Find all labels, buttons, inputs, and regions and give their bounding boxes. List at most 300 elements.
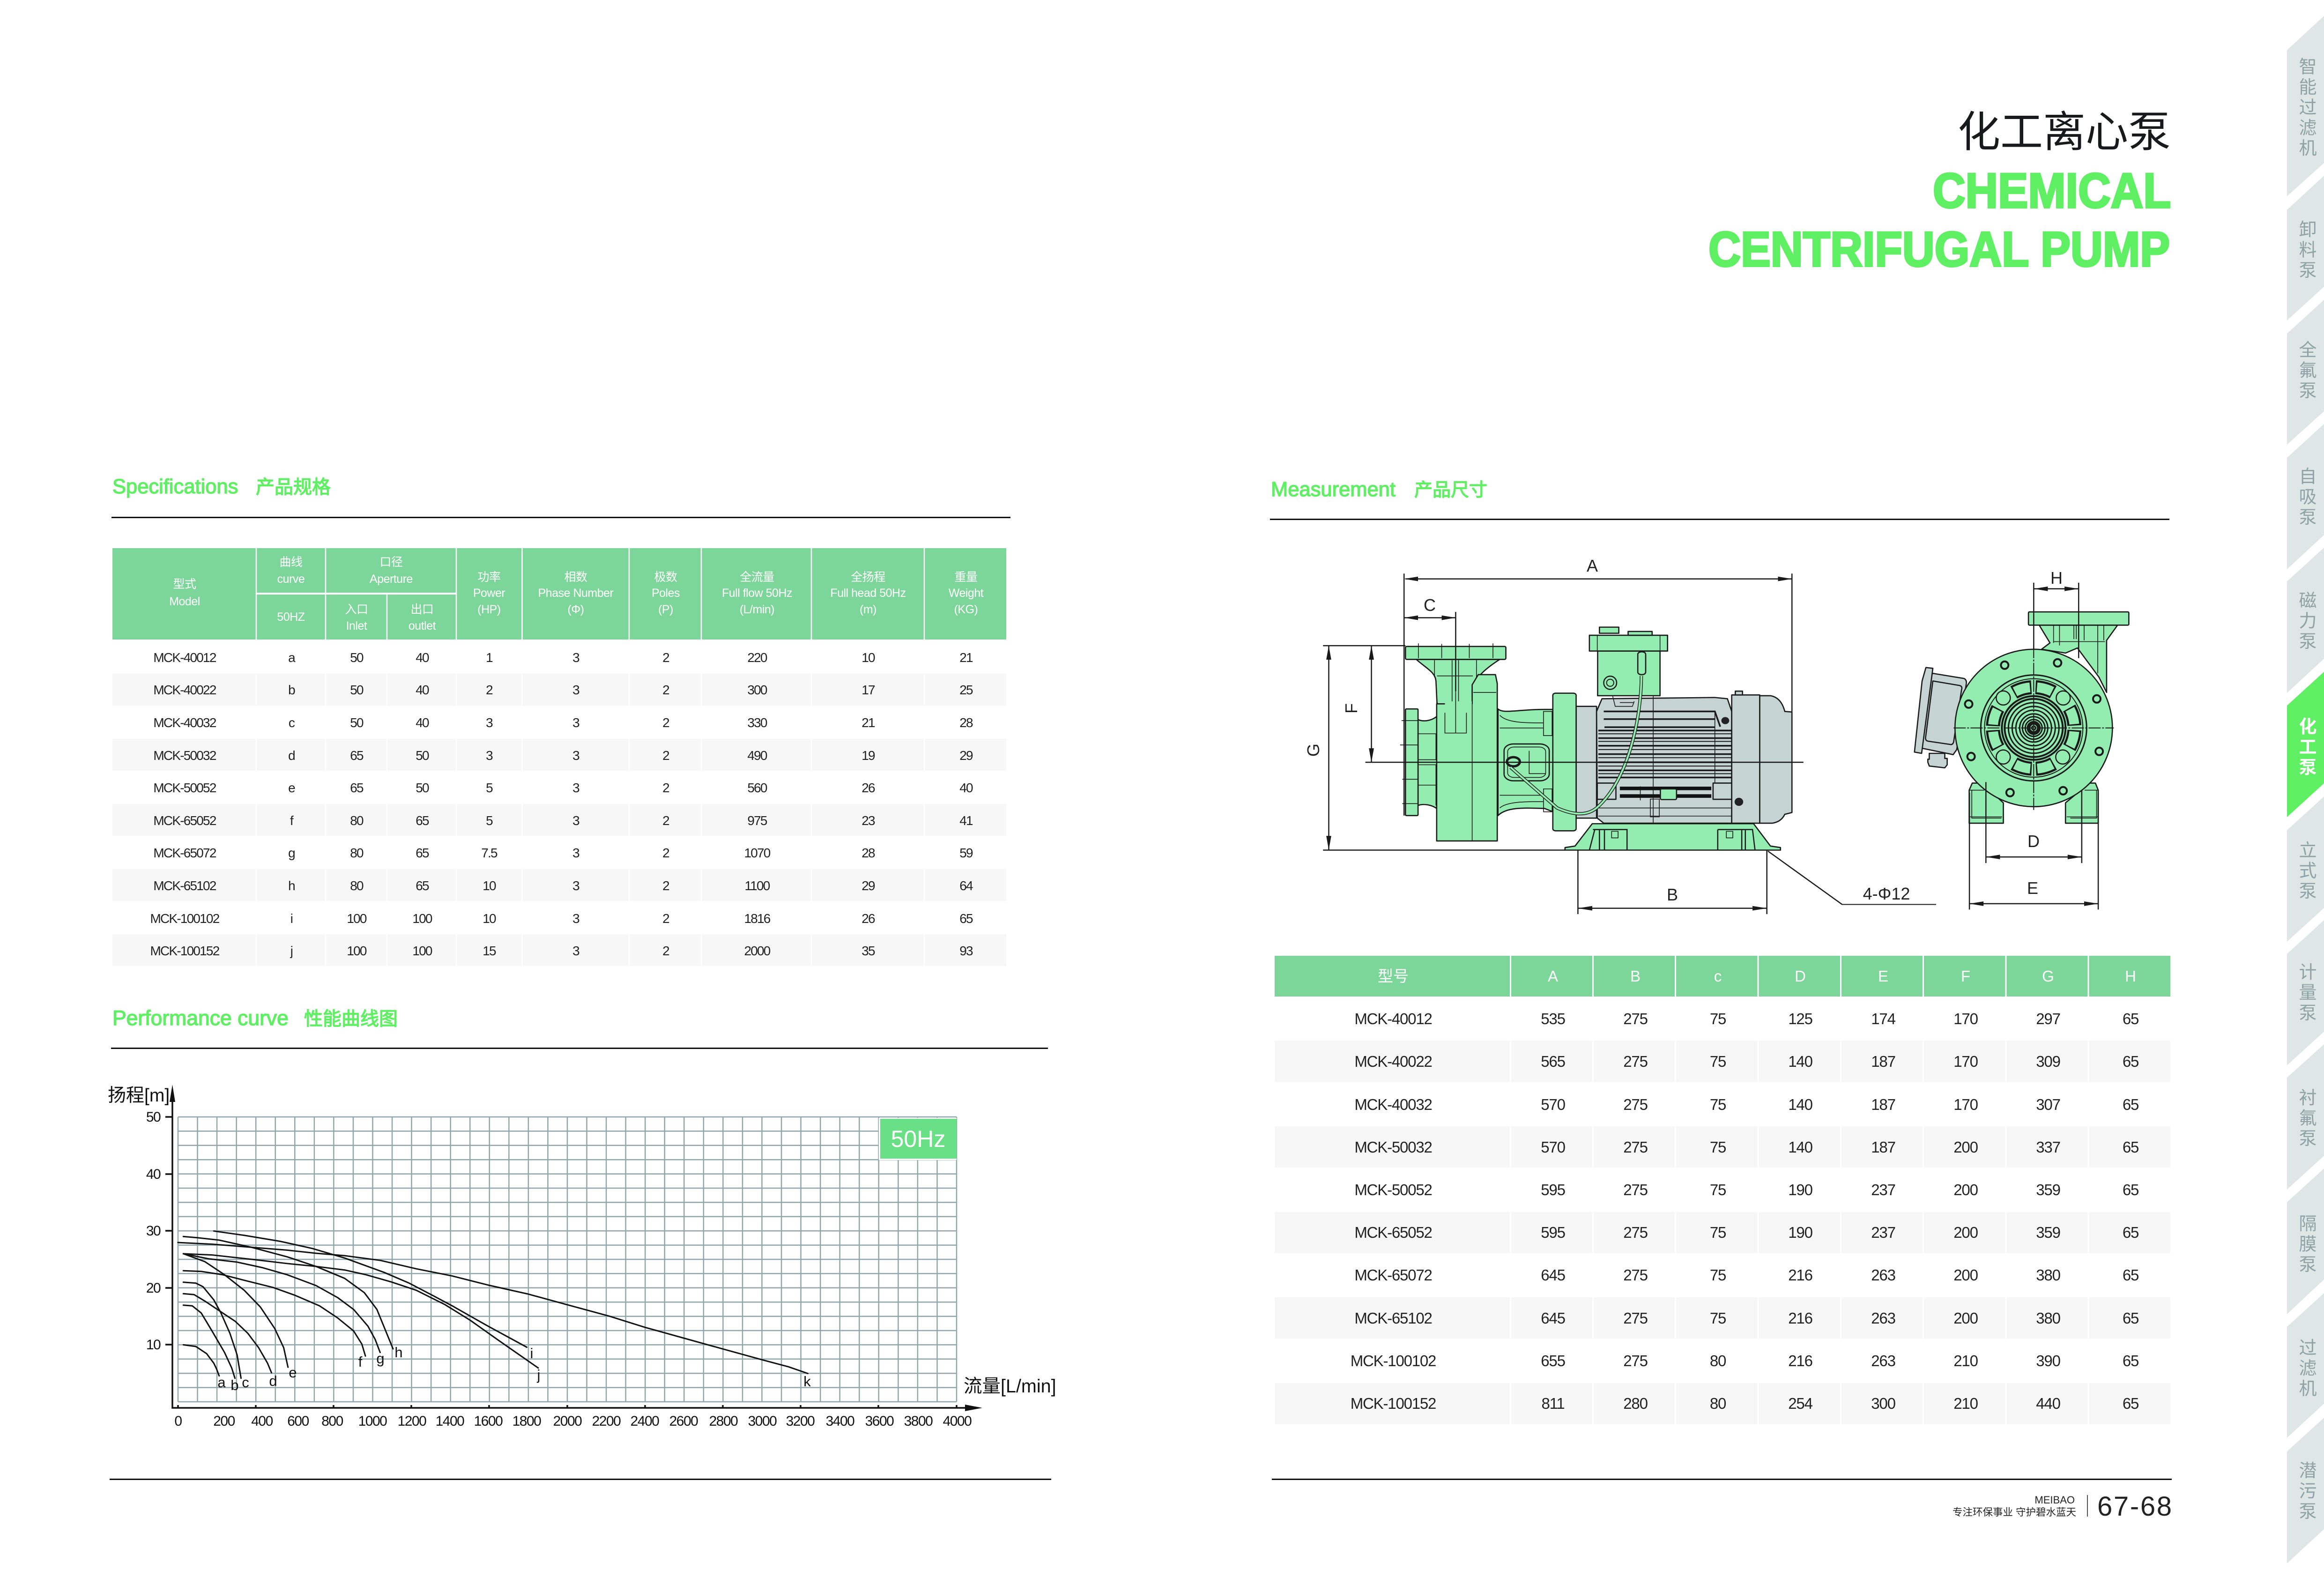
measurement row MCK-100152: MCK-100152 — [1351, 1395, 1436, 1412]
tab: 自吸泵 — [2287, 424, 2324, 569]
spec row MCK-65102: 80 — [350, 878, 364, 893]
measurement row MCK-65072: 75 — [1710, 1266, 1726, 1284]
spec row MCK-65052: 41 — [959, 813, 973, 828]
spec row MCK-40012: 1 — [486, 650, 493, 665]
heading: specifications — [111, 476, 1010, 518]
y tick labels: 40 — [146, 1167, 161, 1182]
measurement row MCK-40022: 275 — [1623, 1053, 1648, 1070]
spec row MCK-50052 — [153, 781, 973, 795]
curve labels: e — [289, 1364, 297, 1381]
spec row MCK-50032: 50 — [416, 748, 429, 763]
measurement row MCK-65102: 275 — [1623, 1309, 1648, 1327]
heading: measurement: 产品尺寸 — [1414, 480, 1487, 500]
title block — [1708, 97, 2171, 277]
measurement row MCK-100152: 254 — [1788, 1395, 1813, 1412]
spec row MCK-40022: 50 — [350, 683, 364, 697]
spec table header: 口径 — [379, 556, 403, 569]
measurement row MCK-50052 — [1354, 1181, 2138, 1198]
measurement row MCK-65102: 75 — [1710, 1309, 1726, 1327]
measurement row MCK-40022: MCK-40022 — [1354, 1053, 1432, 1070]
spec row MCK-100102: 2 — [662, 911, 669, 926]
spec table header: (m) — [860, 603, 876, 616]
spec table header: 极数 — [654, 571, 677, 584]
outlet flange, neck and feet — [1969, 612, 2129, 823]
measurement row MCK-40012: MCK-40012 — [1354, 1010, 1432, 1027]
heading: specifications: 产品规格 — [256, 477, 331, 498]
x tick labels: 3600 — [865, 1413, 894, 1429]
spec row MCK-40022: 17 — [861, 683, 875, 697]
measurement row MCK-65102: 263 — [1871, 1309, 1895, 1327]
measurement row MCK-50032: MCK-50032 — [1354, 1138, 1432, 1156]
spec row MCK-65052: 2 — [662, 813, 669, 828]
measurement row MCK-65052: 237 — [1871, 1224, 1895, 1241]
measurement row MCK-65072: 216 — [1788, 1266, 1812, 1284]
measurement row MCK-40022: 65 — [2123, 1053, 2138, 1070]
spec table header: Full head 50Hz — [830, 587, 906, 600]
tab: 立式泵 — [2287, 796, 2324, 942]
spec row MCK-50032: d — [288, 748, 295, 763]
curve labels: f — [358, 1354, 363, 1370]
spec row MCK-50052: 65 — [350, 781, 364, 795]
callout: 4-Φ12 mounting holes: 4-Φ12 — [1863, 884, 1910, 903]
measurement row MCK-65052: 190 — [1788, 1224, 1813, 1241]
tab: 衬氟泵 — [2287, 1044, 2324, 1190]
measurement row MCK-40022: 309 — [2036, 1053, 2060, 1070]
spec row MCK-50052: 2 — [662, 781, 669, 795]
spec row MCK-65052: f — [290, 813, 294, 828]
measurement row MCK-40012: 125 — [1788, 1010, 1812, 1027]
measurement row MCK-100152: 440 — [2036, 1395, 2061, 1412]
measurement row MCK-40022: 140 — [1788, 1053, 1813, 1070]
x tick labels: 1400 — [436, 1413, 464, 1429]
spec row MCK-100152: 100 — [347, 944, 367, 958]
spec table header: Inlet — [346, 619, 367, 632]
spec row MCK-40012 — [153, 650, 973, 665]
front view labels — [2027, 568, 2063, 898]
x tick labels: 1800 — [512, 1413, 541, 1429]
chart axes — [165, 1085, 982, 1411]
measurement row MCK-40022 — [1354, 1053, 2138, 1070]
tab: 智能过滤机 — [2287, 16, 2324, 196]
x tick labels: 1000 — [358, 1413, 387, 1429]
spec table header: 功率 — [477, 571, 501, 584]
measurement table header: c — [1714, 967, 1722, 985]
x tick labels: 1200 — [398, 1413, 426, 1429]
measurement table header: F — [1961, 967, 1970, 985]
measurement row MCK-40032: 75 — [1710, 1096, 1726, 1113]
discharge flange — [1405, 643, 1506, 733]
x tick labels — [174, 1413, 972, 1429]
tab: 全氟泵: 全氟泵 — [2296, 341, 2317, 402]
title: CHEMICAL: CHEMICAL — [1933, 164, 2171, 218]
spec row MCK-65102: 29 — [861, 878, 875, 893]
spec row MCK-65052 — [153, 813, 973, 828]
measurement row MCK-50052: 75 — [1710, 1181, 1726, 1198]
measurement row MCK-65052 — [1354, 1224, 2138, 1241]
dimension arrows — [1326, 577, 1792, 910]
spec table header: 型式 — [173, 578, 196, 591]
spec row MCK-40012: MCK-40012 — [153, 650, 216, 665]
page number: 67-68 — [2097, 1491, 2172, 1522]
measurement row MCK-65052: 595 — [1541, 1224, 1565, 1241]
curve labels: k — [803, 1373, 811, 1390]
tab: 过滤机: 过滤机 — [2296, 1339, 2316, 1399]
measurement row MCK-65072: 200 — [1953, 1266, 1978, 1284]
spec row MCK-50032: 490 — [747, 748, 767, 763]
spec row MCK-65072: 7.5 — [481, 846, 497, 860]
spec row MCK-65102: 64 — [959, 878, 973, 893]
tab: 隔膜泵: 隔膜泵 — [2296, 1214, 2316, 1275]
x tick labels: 2800 — [709, 1413, 738, 1429]
spec row MCK-40032: 3 — [572, 715, 579, 730]
curve labels: c — [242, 1374, 249, 1391]
measurement row MCK-40022: 187 — [1871, 1053, 1895, 1070]
spec row MCK-40022: 25 — [959, 683, 973, 697]
spec row MCK-40012: 21 — [959, 650, 973, 665]
measurement table header: H — [2125, 967, 2136, 985]
spec row MCK-100152: MCK-100152 — [150, 944, 220, 958]
spec table header: Poles — [652, 587, 680, 600]
measurement row MCK-100102: 263 — [1871, 1352, 1895, 1369]
heading: measurement: Measurement — [1271, 478, 1396, 501]
spec table header: outlet — [408, 619, 436, 632]
measurement row MCK-65052: 200 — [1953, 1224, 1978, 1241]
spec row MCK-65102: 2 — [662, 878, 669, 893]
measurement row MCK-40032: MCK-40032 — [1354, 1096, 1432, 1113]
spec row MCK-100102: 1816 — [744, 911, 771, 926]
side view labels: A — [1587, 556, 1598, 575]
y tick labels: 20 — [146, 1280, 161, 1296]
spec row MCK-65102: 65 — [416, 878, 429, 893]
spec table header: 曲线 — [279, 556, 303, 569]
spec row MCK-40012: 3 — [572, 650, 579, 665]
spec table header: Full flow 50Hz — [722, 587, 792, 600]
volute casing — [1437, 661, 1497, 841]
spec row MCK-50032: MCK-50032 — [153, 748, 216, 763]
spec table header: 重量 — [954, 571, 978, 584]
measurement row MCK-50032: 200 — [1953, 1138, 1978, 1156]
measurement row MCK-40032: 170 — [1953, 1096, 1978, 1113]
measurement row MCK-50052: 275 — [1623, 1181, 1648, 1198]
measurement row MCK-50052: MCK-50052 — [1354, 1181, 1432, 1198]
spec row MCK-65072: g — [288, 846, 295, 860]
spec row MCK-65072: 80 — [350, 846, 364, 860]
measurement row MCK-40032: 570 — [1541, 1096, 1566, 1113]
spec row MCK-50052: 3 — [572, 781, 579, 795]
measurement row MCK-65102: 216 — [1788, 1309, 1812, 1327]
spec row MCK-50032 — [153, 748, 973, 763]
flange disc and rotor rings — [1953, 646, 2114, 810]
coupling flange — [1553, 693, 1576, 831]
spec row MCK-65102: 3 — [572, 878, 579, 893]
measurement row MCK-65102: 380 — [2036, 1309, 2061, 1327]
spec table header: (HP) — [477, 603, 501, 616]
conduit — [1510, 676, 1641, 814]
spec row MCK-65072: 59 — [959, 846, 973, 860]
measurement row MCK-40022: 170 — [1953, 1053, 1978, 1070]
spec row MCK-40022: 40 — [416, 683, 429, 697]
measurement row MCK-40032: 140 — [1788, 1096, 1813, 1113]
spec row MCK-40032: 330 — [747, 715, 767, 730]
bearing bracket — [1498, 709, 1553, 816]
measurement row MCK-50052: 190 — [1788, 1181, 1813, 1198]
spec row MCK-100152: 100 — [412, 944, 432, 958]
measurement row MCK-100102: 216 — [1788, 1352, 1812, 1369]
spec row MCK-40022: b — [288, 683, 295, 697]
spec row MCK-100102: 26 — [861, 911, 875, 926]
measurement row MCK-65052: 359 — [2036, 1224, 2060, 1241]
spec table header: Power — [473, 587, 505, 600]
measurement row MCK-40032: 187 — [1871, 1096, 1895, 1113]
measurement row MCK-65052: MCK-65052 — [1354, 1224, 1432, 1241]
pump side view — [1400, 627, 1792, 850]
spec row MCK-40022: MCK-40022 — [153, 683, 216, 697]
measurement row MCK-65052: 75 — [1710, 1224, 1726, 1241]
fan cover — [1721, 691, 1792, 823]
tab: 卸料泵 — [2287, 176, 2324, 320]
tab: 卸料泵: 卸料泵 — [2296, 220, 2316, 281]
tab: 化工泵 (active) — [2287, 672, 2324, 817]
spec row MCK-65052: 23 — [861, 813, 875, 828]
spec row MCK-40032 — [153, 715, 973, 730]
spec row MCK-100152 — [150, 944, 973, 958]
50Hz badge — [879, 1118, 957, 1160]
sidebar navigation tabs — [2287, 16, 2324, 1563]
measurement row MCK-100102: 655 — [1541, 1352, 1565, 1369]
measurement row MCK-65102: MCK-65102 — [1354, 1309, 1432, 1327]
tab: 化工泵 (active): 化工泵 — [2296, 717, 2317, 778]
spec row MCK-65052: 80 — [350, 813, 364, 828]
motor body — [1596, 685, 1732, 827]
spec row MCK-65052: 5 — [486, 813, 493, 828]
curve labels: a — [217, 1374, 226, 1391]
spec row MCK-40022: 300 — [747, 683, 767, 697]
spec row MCK-40022: 3 — [572, 683, 579, 697]
x tick labels: 0 — [174, 1413, 182, 1429]
measurement row MCK-65072: MCK-65072 — [1354, 1266, 1432, 1284]
spec row MCK-65052: MCK-65052 — [153, 813, 216, 828]
x tick labels: 4000 — [943, 1413, 972, 1429]
spec table header: 全扬程 — [851, 571, 885, 584]
measurement row MCK-40012: 297 — [2036, 1010, 2060, 1027]
terminal box — [1589, 627, 1668, 707]
measurement row MCK-100152: 280 — [1623, 1395, 1648, 1412]
spec table header: 50HZ — [277, 610, 305, 624]
measurement row MCK-65072: 65 — [2123, 1266, 2138, 1284]
spec table header: 相数 — [564, 571, 587, 584]
front view labels: H — [2050, 568, 2063, 588]
measurement row MCK-50032: 65 — [2123, 1138, 2138, 1156]
measurement row MCK-50032: 337 — [2036, 1138, 2060, 1156]
spec row MCK-65072: 2 — [662, 846, 669, 860]
measurement row MCK-50052: 65 — [2123, 1181, 2138, 1198]
title: Chinese: 化工离心泵 — [1958, 97, 2171, 159]
measurement row MCK-40032: 307 — [2036, 1096, 2060, 1113]
spec row MCK-65072: 3 — [572, 846, 579, 860]
tab: 智能过滤机: 智能过滤机 — [2296, 57, 2316, 159]
curve labels: h — [394, 1344, 403, 1361]
tab: 计量泵 — [2287, 920, 2324, 1065]
spec row MCK-40032: c — [289, 715, 295, 730]
measurement row MCK-100102 — [1351, 1352, 2138, 1369]
spec table header: Aperture — [370, 573, 413, 586]
measurement row MCK-65102: 200 — [1953, 1309, 1978, 1327]
spec row MCK-50032: 19 — [861, 748, 875, 763]
tab: 过滤机 — [2287, 1293, 2324, 1438]
spec row MCK-100102: MCK-100102 — [150, 911, 220, 926]
dimension lines — [1323, 573, 1842, 914]
x tick labels: 3800 — [904, 1413, 933, 1429]
x tick labels: 2000 — [553, 1413, 582, 1429]
performance curve chart — [108, 1085, 1056, 1429]
spec row MCK-40022 — [153, 683, 973, 697]
measurement table header — [1275, 956, 2170, 997]
measurement table header: 型号 — [1378, 967, 1409, 985]
spec row MCK-65072: 65 — [416, 846, 429, 860]
measurement row MCK-65102 — [1354, 1309, 2138, 1327]
tab: 自吸泵: 自吸泵 — [2296, 467, 2316, 528]
spec table header: Phase Number — [538, 587, 614, 600]
measurement row MCK-50052: 237 — [1871, 1181, 1895, 1198]
spec row MCK-100152: 93 — [959, 944, 973, 958]
measurement row MCK-50032: 140 — [1788, 1138, 1813, 1156]
spec row MCK-65102: MCK-65102 — [153, 878, 216, 893]
measurement row MCK-50032 — [1354, 1138, 2138, 1156]
side view labels: B — [1667, 885, 1678, 904]
spec row MCK-100152: 2 — [662, 944, 669, 958]
tab: 磁力泵: 磁力泵 — [2296, 591, 2317, 652]
spec table header: 入口 — [345, 603, 368, 616]
measurement row MCK-100102: 65 — [2123, 1352, 2138, 1369]
x tick labels: 3000 — [748, 1413, 777, 1429]
spec row MCK-100152: 2000 — [744, 944, 771, 958]
spec row MCK-40032: 3 — [486, 715, 493, 730]
heading: performance curve: 性能曲线图 — [304, 1009, 398, 1029]
measurement row MCK-50032: 187 — [1871, 1138, 1895, 1156]
measurement row MCK-65072: 645 — [1541, 1266, 1565, 1284]
curve labels: b — [230, 1377, 239, 1393]
measurement row MCK-65052: 65 — [2123, 1224, 2138, 1241]
spec row MCK-100102 — [150, 911, 973, 926]
x tick labels: 3200 — [786, 1413, 815, 1429]
measurement table header: G — [2042, 967, 2054, 985]
measurement row MCK-100102: 275 — [1623, 1352, 1648, 1369]
spec row MCK-40032: 21 — [861, 715, 875, 730]
y axis title: 扬程[m] — [108, 1086, 170, 1106]
measurement row MCK-40012: 535 — [1541, 1010, 1565, 1027]
spec row MCK-65102: h — [288, 878, 295, 893]
specifications table — [112, 548, 1006, 966]
tab: 隔膜泵 — [2287, 1168, 2324, 1314]
measurement table header: E — [1878, 967, 1888, 985]
measurement row MCK-65102: 645 — [1541, 1309, 1565, 1327]
bottom rule left — [110, 1479, 1051, 1480]
spec row MCK-40012: 2 — [662, 650, 669, 665]
y tick labels: 30 — [146, 1223, 161, 1239]
x tick labels: 2400 — [631, 1413, 659, 1429]
measurement row MCK-65072: 263 — [1871, 1266, 1895, 1284]
measurement row MCK-40022: 75 — [1710, 1053, 1726, 1070]
x tick labels: 200 — [213, 1413, 235, 1429]
x tick labels: 3400 — [826, 1413, 854, 1429]
measurement row MCK-50032: 275 — [1623, 1138, 1648, 1156]
measurement row MCK-40032 — [1354, 1096, 2138, 1113]
spec table header: (KG) — [954, 603, 978, 616]
curve labels: g — [376, 1350, 385, 1367]
spec row MCK-40012: 220 — [747, 650, 767, 665]
measurement table stripes — [1275, 956, 2170, 1424]
tab: 全氟泵 — [2287, 300, 2324, 445]
motor base — [1565, 824, 1781, 850]
x tick labels: 2600 — [669, 1413, 698, 1429]
measurement table header: D — [1795, 967, 1806, 985]
spec table header: (Φ) — [567, 603, 584, 616]
measurement table header: A — [1548, 967, 1558, 985]
measurement row MCK-100102: 80 — [1710, 1352, 1726, 1369]
measurement row MCK-50052: 359 — [2036, 1181, 2060, 1198]
spec row MCK-65052: 3 — [572, 813, 579, 828]
tab: 潜污泵 — [2287, 1418, 2324, 1563]
tab: 磁力泵 — [2287, 548, 2324, 693]
measurement row MCK-100152: 80 — [1710, 1395, 1726, 1412]
curve labels: j — [537, 1367, 540, 1383]
front view labels: E — [2027, 878, 2038, 898]
spec row MCK-65072 — [153, 846, 973, 860]
spec row MCK-65102: 1100 — [744, 878, 770, 893]
measurement row MCK-50032: 570 — [1541, 1138, 1566, 1156]
spec row MCK-40012: a — [288, 650, 296, 665]
heading: measurement — [1270, 478, 2169, 520]
spec row MCK-100102: 100 — [412, 911, 432, 926]
measurement row MCK-50052: 595 — [1541, 1181, 1565, 1198]
curve labels: d — [269, 1373, 277, 1389]
measurement row MCK-100152: 300 — [1871, 1395, 1896, 1412]
spec row MCK-50052: 50 — [416, 781, 429, 795]
spec table header: (P) — [658, 603, 673, 616]
measurement row MCK-40012: 174 — [1871, 1010, 1896, 1027]
x tick labels: 800 — [321, 1413, 343, 1429]
spec row MCK-100102: 65 — [959, 911, 973, 926]
spec row MCK-40032: MCK-40032 — [153, 715, 216, 730]
spec row MCK-65102 — [153, 878, 973, 893]
y tick labels: 10 — [146, 1337, 161, 1353]
measurement row MCK-100152: 65 — [2123, 1395, 2138, 1412]
spec row MCK-65072: 28 — [861, 846, 875, 860]
spec row MCK-100102: 10 — [483, 911, 496, 926]
spec row MCK-100102: 100 — [347, 911, 367, 926]
spec row MCK-50052: 40 — [959, 781, 973, 795]
measurement row MCK-100102: MCK-100102 — [1351, 1352, 1436, 1369]
measurement row MCK-100102: 390 — [2036, 1352, 2061, 1369]
side view labels — [1304, 556, 1678, 904]
spec table header — [112, 548, 1006, 640]
pump curves — [178, 1231, 808, 1378]
spec row MCK-50032: 65 — [350, 748, 364, 763]
heading: performance curve — [111, 1007, 1048, 1049]
curve labels: i — [530, 1345, 533, 1361]
spec row MCK-50052: 5 — [486, 781, 493, 795]
x tick labels: 1600 — [474, 1413, 503, 1429]
spec row MCK-65052: 65 — [416, 813, 429, 828]
spec table header: Weight — [949, 587, 984, 600]
measurement row MCK-40012: 170 — [1953, 1010, 1978, 1027]
tab: 潜污泵: 潜污泵 — [2296, 1461, 2316, 1522]
tab: 衬氟泵: 衬氟泵 — [2296, 1088, 2316, 1149]
measurement row MCK-40012 — [1354, 1010, 2138, 1027]
x axis title: 流量[L/min] — [964, 1376, 1056, 1397]
measurement row MCK-100152: 811 — [1541, 1395, 1565, 1412]
front view dimension lines — [1969, 583, 2098, 909]
